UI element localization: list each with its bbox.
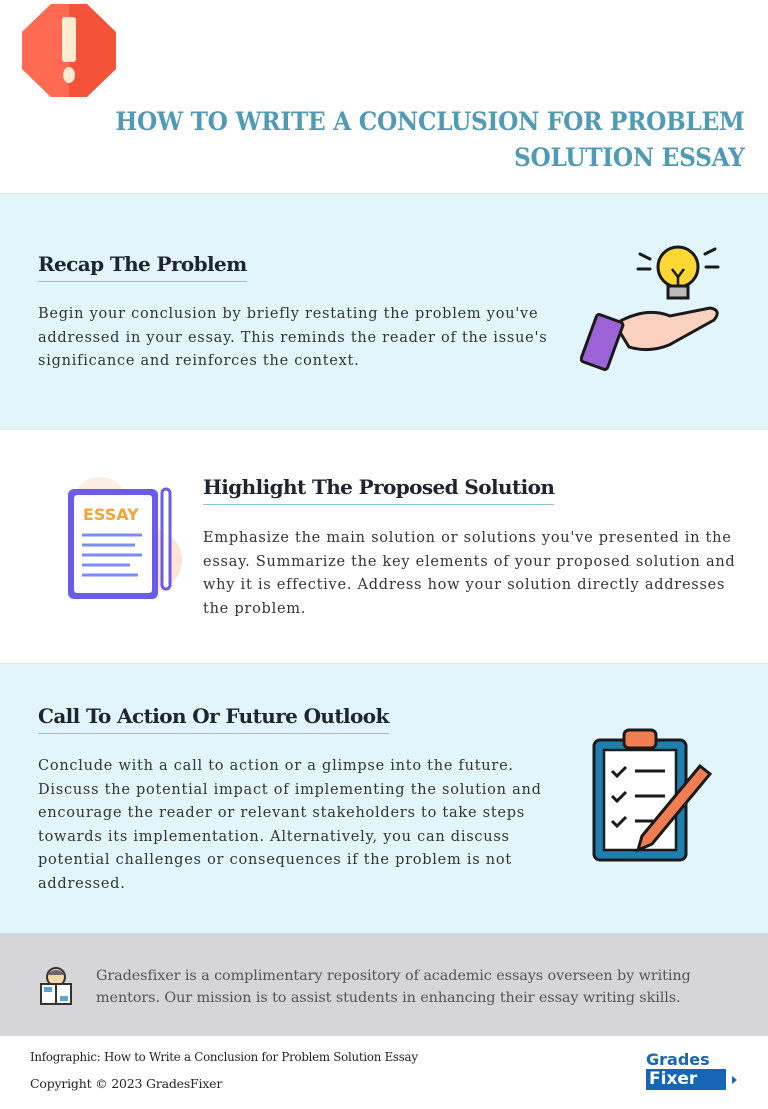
panel: about gradesfixer	[0, 933, 768, 1036]
heading: call to action: Call To Action Or Future Outlook	[38, 704, 389, 728]
text: recap: Begin your conclusion by briefly restating the problem you've addressed in your essay. This reminds the reader of the issue's significance and reinforces the context.	[38, 306, 547, 369]
text: call to action: Conclude with a call to action or a glimpse into the future. Discuss the potential impact of implementing the solution and encourage the reader or relevant stakeholders to take steps towards its implementation. Alternatively, you can discuss potential challenges or consequences if the problem is not addressed.	[38, 758, 542, 892]
logo: gradesfixer: Fixer	[649, 1069, 697, 1089]
panel: highlight solution	[0, 429, 768, 663]
text: solution: Emphasize the main solution or solutions you've presented in the essay. Summarize the key elements of your proposed solution and why it is effective. Address how your solution directly addresses the problem.	[203, 530, 735, 616]
title: HOW TO WRITE A CONCLUSION FOR PROBLEM	[115, 107, 744, 136]
text: about: Gradesfixer is a complimentary repository of academic essays overseen by writing mentors. Our mission is to assist students in enhancing their essay writing skills.	[96, 968, 691, 1006]
panel: recap the problem	[0, 193, 768, 429]
icon: hand with lightbulb	[580, 246, 720, 371]
icon: clipboard checklist	[592, 728, 712, 862]
logo: gradesfixer	[646, 1050, 737, 1090]
title	[115, 107, 745, 172]
heading: solution: Highlight The Proposed Solution	[203, 475, 554, 499]
logo: gradesfixer: Grades	[646, 1050, 710, 1069]
icon: essay document	[68, 477, 182, 599]
icon: stop sign warning	[22, 4, 116, 97]
title: SOLUTION ESSAY	[513, 143, 744, 172]
icon: essay document: ESSAY	[83, 505, 139, 524]
panel: call to action	[0, 663, 768, 933]
heading: recap: Recap The Problem	[38, 252, 247, 276]
icon: reader	[40, 967, 72, 1005]
footer: infographic caption: Infographic: How to Write a Conclusion for Problem Solution Essay	[30, 1050, 418, 1064]
footer: copyright: Copyright © 2023 GradesFixer	[30, 1076, 222, 1091]
